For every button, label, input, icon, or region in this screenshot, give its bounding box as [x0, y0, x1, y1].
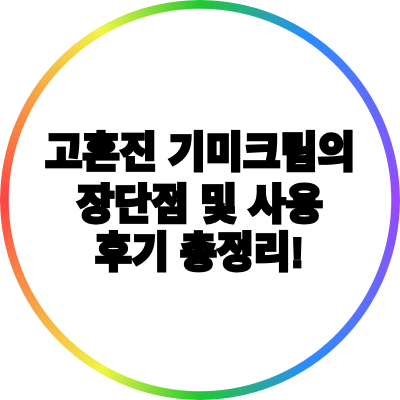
title line 1: 고혼진 기미크림의: [45, 129, 355, 176]
title line 2: 장단점 및 사용: [77, 181, 323, 228]
title line 3: 후기 총정리!: [95, 229, 304, 276]
